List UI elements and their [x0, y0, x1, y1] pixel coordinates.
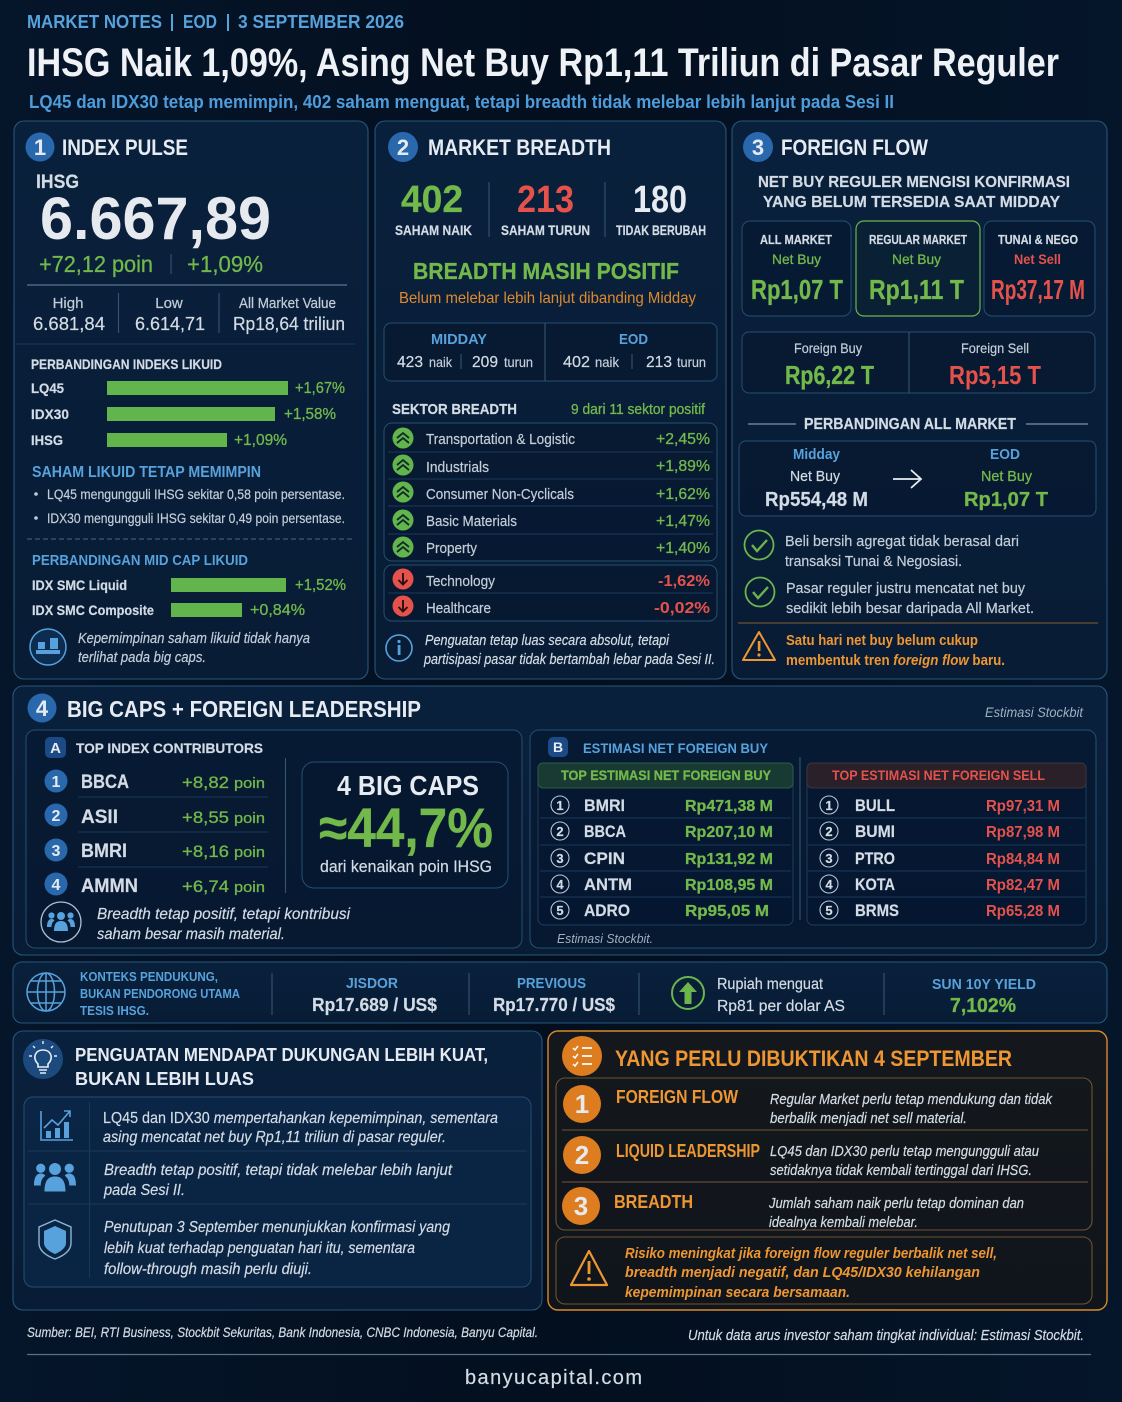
- icon: warning: [743, 632, 775, 660]
- icon: liquid leadership: [30, 629, 66, 665]
- item: breadth: idealnya kembali melebar.: [769, 1215, 918, 1231]
- contributors list: 4: [52, 877, 61, 894]
- card: all market: Rp1,07 T: [751, 274, 843, 305]
- negative sectors table: Healthcare: [426, 601, 491, 617]
- negative sectors table: [384, 565, 717, 621]
- takeaway 2: pada Sesi II.: [103, 1182, 185, 1199]
- IHSG value: 6.667,89: [40, 185, 271, 252]
- panel: market breadth: [375, 121, 726, 679]
- note: contributors: Breadth tetap positif, tetapi kontribusi: [97, 906, 350, 923]
- breadth counts: SAHAM TURUN: [501, 222, 590, 238]
- contributors list: 2: [52, 808, 61, 825]
- arrow: [893, 470, 921, 488]
- note: breadth: Penguatan tetap luas secara absolut, tetapi: [425, 633, 670, 649]
- IHSG change: [39, 251, 263, 277]
- heading: takeaways: BUKAN LEBIH LUAS: [75, 1068, 254, 1089]
- note: contributors: saham besar masih material.: [97, 926, 285, 943]
- bar chart: indeks likuid: IDX30: [31, 406, 69, 422]
- table: top net foreign buy: Rp108,95 M: [685, 877, 773, 894]
- footer: sources: Sumber: BEI, RTI Business, Stockbit Sekuritas, Bank Indonesia, CNBC Indonesia, Banyu Capital.: [27, 1325, 538, 1340]
- takeaway 1: asing mencatat net buy Rp1,11 triliun di pasar reguler.: [103, 1129, 446, 1146]
- note: liquid leadership: Kepemimpinan saham likuid tidak hanya: [78, 631, 310, 647]
- table: top net foreign sell: 1: [825, 798, 833, 813]
- note: breadth: [423, 633, 715, 668]
- badge B: [548, 737, 568, 757]
- midday vs eod table: 213: [646, 354, 672, 371]
- table: top net foreign buy: ANTM: [584, 875, 632, 894]
- card: regular market: Net Buy: [892, 251, 941, 267]
- verdict: BREADTH MASIH POSITIF: [413, 258, 679, 284]
- table: top net foreign buy: BBCA: [584, 822, 626, 841]
- contributors list: [44, 770, 268, 897]
- heading: yang perlu dibuktikan: YANG PERLU DIBUKTIKAN 4 SEPTEMBER: [615, 1046, 1012, 1071]
- bullet list: [34, 487, 345, 526]
- contributors list: +8,16: [182, 842, 229, 861]
- heading: big caps: BIG CAPS + FOREIGN LEADERSHIP: [67, 696, 421, 722]
- source tag: Estimasi Stockbit: [985, 704, 1084, 720]
- heading: estimasi net foreign buy: ESTIMASI NET FOREIGN BUY: [583, 740, 769, 756]
- IHSG change: +72,12 poin: [39, 251, 153, 277]
- takeaway 3: lebih kuat terhadap penguatan hari itu, sementara: [104, 1240, 415, 1257]
- positive sectors table: +1,89%: [656, 458, 710, 475]
- metric: JISDOR: Rp17.689 / US$: [312, 995, 437, 1015]
- contributors list: AMMN: [81, 876, 138, 897]
- contributors list: BMRI: [81, 841, 127, 862]
- card: tunai and nego: Net Sell: [1014, 251, 1061, 267]
- item: foreign flow: FOREIGN FLOW: [616, 1087, 738, 1107]
- contributors list: poin: [234, 844, 265, 861]
- breadth counts: SAHAM NAIK: [395, 222, 472, 238]
- midday vs eod table: turun: [504, 354, 533, 370]
- warning text: [786, 632, 1005, 669]
- IHSG label: IHSG: [36, 172, 79, 193]
- icon: rupiah up arrow: [672, 977, 704, 1009]
- warning text: membentuk tren foreign flow baru.: [786, 652, 1005, 669]
- subheading: saham likuid: SAHAM LIKUID TETAP MEMIMPIN: [32, 464, 261, 481]
- table: top net foreign buy: Rp131,92 M: [685, 851, 773, 868]
- table: top net foreign sell: [807, 763, 1086, 925]
- positive sectors table: Transportation & Logistic: [426, 432, 575, 448]
- contributors list: +6,74: [182, 877, 229, 896]
- risk text: kepemimpinan secara bersamaan.: [625, 1284, 850, 1301]
- metric: previous: PREVIOUS: [517, 975, 586, 992]
- metric: previous: [493, 975, 615, 1015]
- stats row: Rp18,64 triliun: [233, 314, 345, 334]
- foreign buy and sell box: [742, 332, 1095, 393]
- badge A: A: [50, 740, 61, 757]
- midday to eod comparison: Midday: [793, 447, 840, 463]
- table: top net foreign buy: TOP ESTIMASI NET FOREIGN BUY: [561, 768, 771, 783]
- table: top net foreign sell: KOTA: [855, 875, 895, 894]
- bar chart: mid cap: IDX SMC Composite: [32, 602, 154, 618]
- panel number 4: [28, 694, 56, 722]
- table: top net foreign sell: Rp97,31 M: [986, 798, 1060, 815]
- bar chart: mid cap: PERBANDINGAN MID CAP LIKUID: [32, 552, 248, 569]
- midday to eod comparison: Rp1,07 T: [964, 489, 1048, 511]
- item: liquid leadership: setidaknya tidak kembali tertinggal dari IHSG.: [770, 1163, 1032, 1179]
- rupiah note: Rupiah menguat: [717, 976, 824, 993]
- sub-panel B: foreign net estimates: [530, 730, 1096, 948]
- icon: shield: [39, 1220, 71, 1259]
- foreign flow headline: NET BUY REGULER MENGISI KONFIRMASI: [758, 174, 1070, 191]
- sector breadth heading: [392, 401, 706, 418]
- heading: index pulse: INDEX PULSE: [62, 135, 188, 160]
- icon: checklist: [562, 1036, 602, 1076]
- table: top net foreign sell: 4: [825, 877, 833, 892]
- contributors list: BBCA: [81, 772, 129, 793]
- negative sectors table: Technology: [426, 574, 496, 590]
- midday to eod comparison: EOD: [990, 447, 1020, 463]
- stats row: High: [53, 295, 83, 312]
- card: regular market: REGULAR MARKET: [869, 232, 967, 247]
- context label: BUKAN PENDORONG UTAMA: [80, 987, 240, 1001]
- table: top net foreign buy: 4: [556, 877, 564, 892]
- takeaway 1: [103, 1110, 498, 1146]
- table: top net foreign buy: BMRI: [584, 796, 625, 815]
- note: liquid leadership: [78, 631, 310, 666]
- table: top net foreign sell: Rp87,98 M: [986, 824, 1060, 841]
- midday vs eod table: naik: [595, 354, 620, 370]
- table: top net foreign buy: Rp471,38 M: [685, 798, 773, 815]
- icon: people: [41, 902, 81, 942]
- icon: rising chart: [41, 1111, 73, 1140]
- contributors list: poin: [234, 810, 265, 827]
- positive sectors table: [384, 423, 717, 561]
- table: top net foreign buy: 2: [556, 824, 564, 839]
- card: regular market: Rp1,11 T: [869, 274, 964, 305]
- table: top net foreign sell: 2: [825, 824, 833, 839]
- badge B: B: [553, 739, 563, 755]
- warning text: Satu hari net buy belum cukup: [786, 632, 978, 649]
- breadth counts: 402: [401, 179, 463, 221]
- panel: index pulse: [14, 121, 368, 679]
- table: top net foreign sell: 3: [825, 851, 833, 866]
- item: liquid leadership: LQ45 dan IDX30 perlu tetap mengungguli atau: [770, 1144, 1039, 1160]
- takeaway 2: Breadth tetap positif, tetapi tidak melebar lebih lanjut: [104, 1162, 453, 1179]
- metric: SUN yield: [932, 976, 1036, 1017]
- card: tunai and nego: [984, 221, 1095, 316]
- item: liquid leadership: LIQUID LEADERSHIP: [616, 1141, 760, 1161]
- bullet list: LQ45 mengungguli IHSG sekitar 0,58 poin persentase.: [47, 487, 345, 502]
- midday vs eod table: EOD: [619, 331, 648, 348]
- panel number 1: 1: [34, 135, 46, 160]
- item: liquid leadership: [563, 1136, 1039, 1179]
- table: top net foreign buy: 1: [556, 798, 564, 813]
- icon: globe: [27, 973, 65, 1011]
- foreign flow headline: YANG BELUM TERSEDIA SAAT MIDDAY: [763, 194, 1060, 211]
- context label: [80, 970, 240, 1018]
- risk callout: [556, 1237, 1092, 1304]
- table: top net foreign buy: Rp207,10 M: [685, 824, 773, 841]
- icon: risk warning: [571, 1251, 607, 1285]
- bullet list: IDX30 mengungguli IHSG sekitar 0,49 poin persentase.: [47, 511, 345, 526]
- panel: yang perlu dibuktikan: [548, 1031, 1107, 1310]
- midday vs eod table: turun: [677, 354, 706, 370]
- breadth counts: TIDAK BERUBAH: [616, 222, 706, 238]
- positive sectors table: +1,47%: [656, 513, 710, 530]
- risk text: Risiko meningkat jika foreign flow reguler berbalik net sell,: [625, 1245, 997, 1262]
- verdict: [399, 258, 696, 307]
- contributors list: ASII: [81, 807, 118, 828]
- metric: JISDOR: [312, 975, 437, 1015]
- positive sectors table: Consumer Non-Cyclicals: [426, 487, 574, 503]
- card: all market: Net Buy: [772, 251, 821, 267]
- header kicker: MARKET NOTES: [27, 12, 162, 32]
- stats row: 6.614,71: [135, 314, 205, 334]
- midday vs eod table: [384, 323, 717, 381]
- heading: contributors: TOP INDEX CONTRIBUTORS: [76, 740, 263, 756]
- item: foreign flow: 1: [575, 1089, 589, 1119]
- negative sectors table: -1,62%: [658, 573, 710, 590]
- takeaway 1: LQ45 dan IDX30 mempertahankan kepemimpinan, sementara: [103, 1110, 498, 1127]
- note: contributors: [97, 906, 350, 943]
- header kicker: 3 SEPTEMBER 2026: [238, 12, 404, 32]
- panel number 2: 2: [397, 135, 409, 160]
- metric: SUN yield: 7,102%: [950, 995, 1016, 1017]
- card: all market: [742, 221, 851, 316]
- table: top net foreign sell: BUMI: [855, 822, 895, 841]
- bar chart: mid cap: IDX SMC Liquid: [32, 577, 127, 593]
- rupiah note: Rp81 per dolar AS: [717, 998, 845, 1015]
- footer: website: banyucapital.com: [465, 1367, 642, 1389]
- header kicker: [27, 12, 404, 32]
- positive sectors table: +1,62%: [656, 486, 710, 503]
- note: breadth: partisipasi pasar tidak bertambah lebar pada Sesi II.: [423, 652, 715, 668]
- icon: people group: [34, 1163, 76, 1192]
- panel number 3: [743, 132, 773, 162]
- item: liquid leadership: 2: [575, 1140, 589, 1170]
- midday vs eod table: 402: [563, 354, 590, 371]
- table: top net foreign sell: BULL: [855, 796, 895, 815]
- source note: Estimasi Stockbit.: [557, 931, 653, 946]
- heading: foreign flow: FOREIGN FLOW: [781, 135, 928, 160]
- table: top net foreign buy: CPIN: [584, 849, 625, 868]
- bar chart: indeks likuid: +1,09%: [234, 432, 287, 449]
- positive sectors table: Industrials: [426, 460, 489, 476]
- panel number 3: 3: [752, 135, 764, 160]
- subheading: all market comparison: PERBANDINGAN ALL MARKET: [804, 416, 1016, 433]
- midday vs eod table: 209: [472, 354, 498, 371]
- checklist item 2: Pasar reguler justru mencatat net buy: [786, 580, 1025, 597]
- IHSG change: +1,09%: [187, 251, 263, 277]
- contributors list: poin: [234, 775, 265, 792]
- panel number 1: [26, 132, 54, 162]
- icon: light bulb: [23, 1039, 63, 1079]
- context label: KONTEKS PENDUKUNG,: [80, 970, 218, 984]
- takeaway 3: [104, 1219, 450, 1278]
- table: top net foreign sell: PTRO: [855, 849, 895, 868]
- table: top net foreign buy: [538, 763, 793, 925]
- contributors list: +8,55: [182, 808, 229, 827]
- callout: 44,7%: ≈44,7%: [319, 796, 493, 859]
- callout: 44,7%: 4 BIG CAPS: [337, 770, 479, 801]
- item: breadth: Jumlah saham naik perlu tetap dominan dan: [768, 1196, 1024, 1212]
- metric: SUN yield: SUN 10Y YIELD: [932, 976, 1036, 993]
- sub-panel A: top index contributors: [26, 730, 522, 948]
- positive sectors table: Basic Materials: [426, 514, 517, 530]
- callout: 44,7%: dari kenaikan poin IHSG: [320, 857, 492, 876]
- sector breadth heading: SEKTOR BREADTH: [392, 401, 517, 418]
- footer: data note: Untuk data arus investor saham tingkat individual: Estimasi Stockbit.: [688, 1328, 1084, 1344]
- contributors list: poin: [234, 879, 265, 896]
- takeaway 3: follow-through masih perlu diuji.: [104, 1261, 312, 1278]
- icon: info: [386, 635, 412, 661]
- rupiah note: [717, 976, 845, 1015]
- item: foreign flow: berbalik menjadi net sell material.: [770, 1111, 967, 1127]
- foreign buy and sell box: Rp6,22 T: [785, 360, 874, 390]
- table: top net foreign sell: Rp65,28 M: [986, 903, 1060, 920]
- bar chart: indeks likuid: +1,58%: [284, 406, 336, 423]
- item: breadth: BREADTH: [614, 1192, 693, 1212]
- context label: TESIS IHSG.: [80, 1004, 149, 1018]
- panel: foreign flow: [732, 121, 1107, 679]
- breadth counts: [395, 179, 706, 238]
- heading: market breadth: MARKET BREADTH: [428, 135, 611, 160]
- panel number 2: [388, 132, 418, 162]
- table: top net foreign sell: Rp84,84 M: [986, 851, 1060, 868]
- checklist item 2: sedikit lebih besar daripada All Market.: [786, 600, 1034, 617]
- metric: JISDOR: JISDOR: [346, 975, 398, 992]
- table: top net foreign sell: 5: [825, 903, 833, 918]
- table: top net foreign buy: 5: [556, 903, 564, 918]
- negative sectors table: -0,02%: [654, 600, 710, 617]
- positive sectors table: +2,45%: [656, 431, 710, 448]
- foreign buy and sell box: Rp5,15 T: [949, 360, 1041, 390]
- midday to eod comparison: Net Buy: [981, 469, 1033, 485]
- table: top net foreign sell: TOP ESTIMASI NET FOREIGN SELL: [832, 768, 1045, 783]
- midday to eod comparison: Net Buy: [790, 469, 841, 485]
- stats row: Low: [155, 295, 183, 312]
- bar chart: indeks likuid: LQ45: [31, 380, 64, 396]
- table: top net foreign sell: Rp82,47 M: [986, 877, 1060, 894]
- panel: supporting context strip: [13, 962, 1107, 1023]
- header kicker: EOD: [183, 12, 217, 32]
- foreign buy and sell box: Foreign Sell: [961, 340, 1029, 356]
- risk text: [625, 1245, 997, 1301]
- callout: 44,7%: [302, 762, 508, 888]
- bar chart: mid cap: [32, 552, 346, 619]
- positive sectors table: Property: [426, 541, 478, 557]
- takeaway 2: [103, 1162, 453, 1199]
- heading: takeaways: PENGUATAN MENDAPAT DUKUNGAN LEBIH KUAT,: [75, 1044, 488, 1065]
- stats row: All Market Value: [239, 295, 336, 312]
- bar chart: indeks likuid: IHSG: [31, 432, 63, 448]
- stats row: [33, 293, 345, 334]
- item: breadth: [562, 1187, 1024, 1231]
- card: tunai and nego: TUNAI & NEGO: [998, 232, 1078, 247]
- sector breadth heading: 9 dari 11 sektor positif: [571, 402, 706, 418]
- bar chart: mid cap: +0,84%: [250, 602, 305, 619]
- foreign buy and sell box: Foreign Buy: [794, 340, 862, 356]
- panel: big caps and foreign leadership: [13, 686, 1107, 955]
- verdict: Belum melebar lebih lanjut dibanding Midday: [399, 290, 696, 307]
- heading: takeaways: [75, 1044, 488, 1089]
- breadth counts: 180: [633, 179, 687, 221]
- stats row: 6.681,84: [33, 314, 105, 334]
- takeaway 3: Penutupan 3 September menunjukkan konfirmasi yang: [104, 1219, 450, 1236]
- breadth counts: 213: [517, 179, 574, 221]
- checklist item 1: transaksi Tunai & Negosiasi.: [785, 553, 962, 570]
- card: regular market: [856, 221, 980, 316]
- contributors list: 3: [52, 843, 61, 860]
- checklist item 1: Beli bersih agregat tidak berasal dari: [785, 533, 1019, 550]
- midday to eod comparison: Rp554,48 M: [765, 489, 868, 511]
- table: top net foreign sell: BRMS: [855, 901, 899, 920]
- card: all market: ALL MARKET: [760, 232, 832, 247]
- item: foreign flow: Regular Market perlu tetap mendukung dan tidak: [770, 1092, 1053, 1108]
- checklist item 1: [744, 530, 1019, 570]
- midday vs eod table: 423: [397, 354, 423, 371]
- subtitle: LQ45 dan IDX30 tetap memimpin, 402 saham menguat, tetapi breadth tidak melebar lebih lanjut pada Sesi II: [29, 92, 894, 112]
- bar chart: indeks likuid: +1,67%: [295, 380, 345, 397]
- checklist item 2: [746, 578, 1034, 617]
- risk text: breadth menjadi negatif, dan LQ45/IDX30 kehilangan: [625, 1264, 980, 1281]
- table: top net foreign buy: ADRO: [584, 901, 630, 920]
- positive sectors table: +1,40%: [656, 540, 710, 557]
- table: top net foreign buy: 3: [556, 851, 564, 866]
- contributors list: +8,82: [182, 773, 229, 792]
- panel: takeaways: [13, 1031, 542, 1310]
- bar chart: mid cap: +1,52%: [295, 577, 346, 594]
- bar chart: indeks likuid: PERBANDINGAN INDEKS LIKUID: [31, 356, 222, 372]
- metric: previous: Rp17.770 / US$: [493, 995, 615, 1015]
- midday vs eod table: naik: [429, 354, 453, 370]
- badge A: [45, 737, 66, 758]
- item: breadth: 3: [574, 1191, 588, 1221]
- midday to eod comparison: [739, 441, 1096, 516]
- note: liquid leadership: terlihat pada big caps.: [78, 650, 206, 666]
- midday vs eod table: MIDDAY: [431, 331, 487, 348]
- contributors list: 1: [52, 774, 61, 791]
- item: foreign flow: [563, 1085, 1053, 1127]
- table: top net foreign buy: Rp95,05 M: [685, 903, 769, 920]
- foreign flow headline: [758, 174, 1070, 211]
- bar chart: indeks likuid: [31, 356, 345, 449]
- panel number 4: 4: [36, 696, 49, 721]
